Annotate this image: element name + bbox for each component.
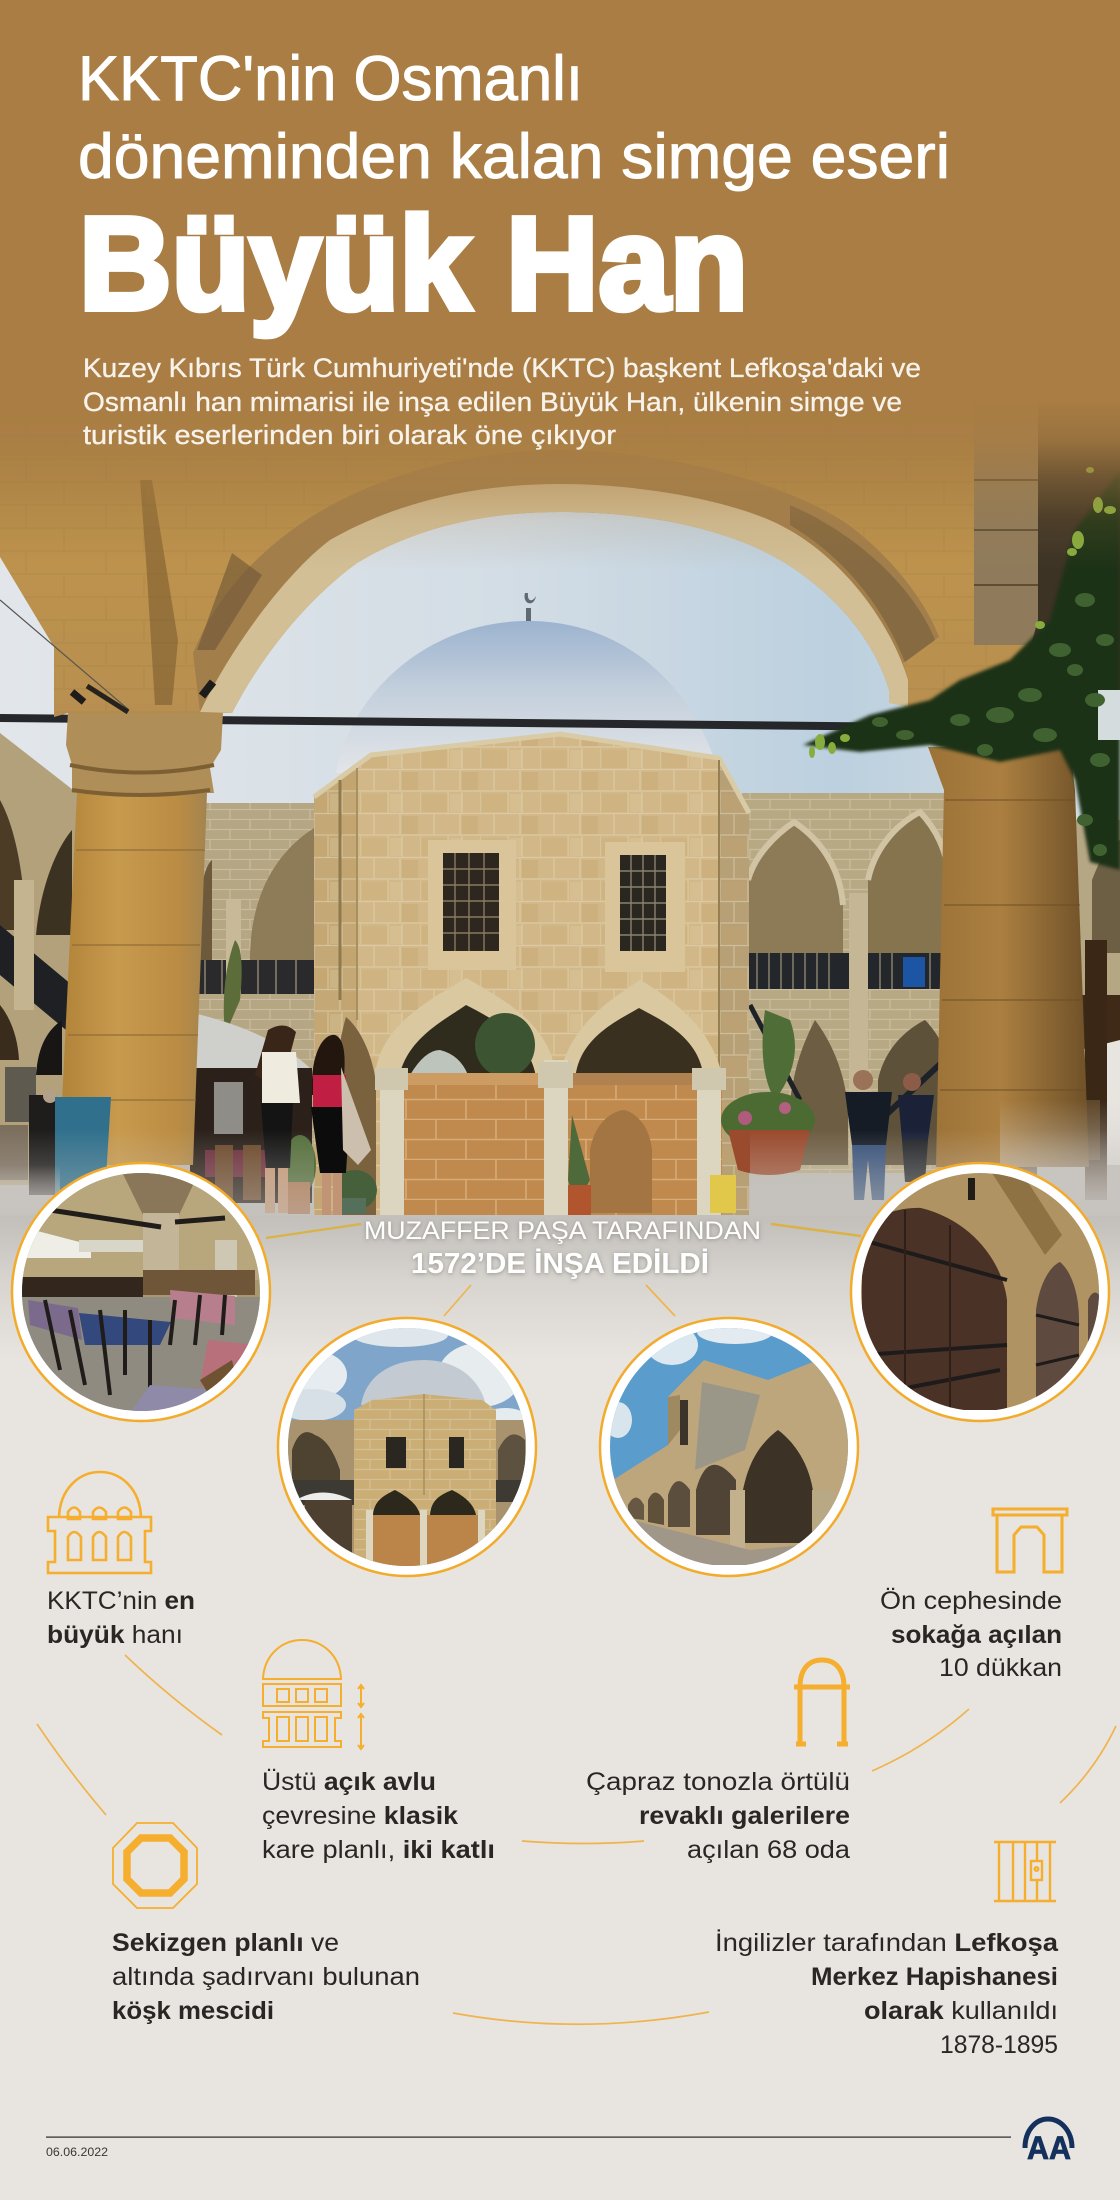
icon: prison bars bbox=[994, 1842, 1056, 1901]
icon: shop gate bbox=[993, 1509, 1067, 1572]
arch inner cream ring bbox=[200, 484, 908, 713]
floor fade at sides bbox=[0, 1138, 314, 1214]
potted plant right bbox=[710, 1092, 815, 1213]
photo circle 2: kiosk and dome bbox=[278, 1318, 536, 1576]
fountain base bbox=[402, 1073, 722, 1215]
building beyond right column bbox=[1075, 820, 1120, 1000]
icon: domed building bbox=[48, 1472, 151, 1573]
intro paragraph: Osmanlı han mimarisi ile inşa edilen Büyük Han, ülkenin simge ve bbox=[83, 387, 902, 417]
text: ten shops: sokağa açılan bbox=[891, 1621, 1062, 1649]
text: ten shops bbox=[880, 1587, 1062, 1682]
wire and lamps bbox=[0, 600, 129, 710]
fact: central prison bbox=[715, 1842, 1059, 2059]
window left bbox=[428, 840, 516, 970]
text: 68 rooms: revaklı galerilere bbox=[639, 1802, 850, 1830]
kiosk arches bbox=[335, 978, 722, 1215]
umbrella bbox=[193, 1013, 310, 1068]
restaurant behind visitors bbox=[190, 1068, 312, 1203]
date: 06.06.2022 bbox=[46, 2147, 108, 2159]
visitors left bbox=[255, 1025, 371, 1215]
caption line 2: 1572’DE İNŞA EDİLDİ bbox=[411, 1248, 709, 1280]
logo: AA: AA bbox=[1027, 2130, 1071, 2166]
wooden table right bbox=[1017, 940, 1120, 1200]
title line 2: döneminden kalan simge eseri bbox=[78, 122, 950, 192]
main photograph: Büyük Han courtyard bbox=[0, 400, 1120, 1360]
text: ten shops: Ön cephesinde bbox=[880, 1587, 1062, 1615]
text: central prison: Merkez Hapishanesi bbox=[811, 1963, 1058, 1991]
text: central prison bbox=[715, 1928, 1059, 2059]
text: open courtyard: çevresine klasik bbox=[262, 1802, 458, 1830]
icon: two storey plan bbox=[263, 1640, 364, 1749]
rib shadow bbox=[140, 480, 178, 705]
road line markings bbox=[266, 1224, 861, 1238]
decorative connector lines bbox=[37, 1285, 1116, 2024]
foliage right bbox=[803, 467, 1120, 870]
icon: octagon bbox=[113, 1823, 197, 1908]
fact: ten shops bbox=[880, 1509, 1067, 1682]
photo circle 4: wooden doors bbox=[851, 1163, 1109, 1421]
fact: 68 rooms bbox=[586, 1660, 850, 1864]
arch outer brown ring bbox=[193, 450, 939, 712]
small plants near visitors bbox=[284, 1135, 377, 1214]
title main name: Büyük Han bbox=[79, 190, 748, 337]
intro paragraph: Kuzey Kıbrıs Türk Cumhuriyeti'nde (KKTC) başkent Lefkoşa'daki ve bbox=[83, 353, 921, 383]
intro paragraph bbox=[83, 353, 921, 450]
fact: octagonal mosque bbox=[112, 1823, 420, 2025]
blue bin bbox=[55, 1097, 111, 1195]
sky bbox=[0, 512, 1082, 820]
text: open courtyard: kare planlı, iki katlı bbox=[262, 1836, 495, 1864]
octagonal kiosk bbox=[314, 734, 749, 1215]
pier and dark corner bbox=[974, 450, 1038, 645]
title bbox=[78, 44, 950, 337]
right stone column bbox=[928, 747, 1089, 1167]
photo circle 3: arcade perspective bbox=[600, 1318, 858, 1576]
visitors right bbox=[845, 1070, 934, 1200]
text: octagonal mosque: köşk mescidi bbox=[112, 1997, 274, 2025]
text: largest han: büyük hanı bbox=[47, 1621, 183, 1649]
vault and arch above bbox=[0, 400, 1120, 720]
window right bbox=[605, 842, 685, 972]
text: central prison: İngilizler tarafından Lefkoşa bbox=[715, 1928, 1059, 1957]
kiosk columns bbox=[375, 1060, 726, 1215]
footer rule bbox=[46, 2136, 1011, 2138]
dome with finial bbox=[336, 593, 718, 773]
fact: open courtyard bbox=[262, 1640, 495, 1864]
text: largest han bbox=[47, 1587, 195, 1649]
text: 68 rooms: Çapraz tonozla örtülü bbox=[586, 1768, 850, 1796]
back wall right bbox=[742, 793, 957, 1173]
left stone column bbox=[59, 712, 223, 1165]
caption: builder and date bbox=[364, 1217, 761, 1280]
title line 1: KKTC'nin Osmanlı bbox=[78, 44, 583, 114]
text: largest han: KKTC’nin en bbox=[47, 1587, 195, 1615]
text: ten shops: 10 dükkan bbox=[939, 1654, 1062, 1682]
ground bbox=[0, 1165, 1120, 1320]
fact: largest han bbox=[47, 1472, 195, 1649]
text: central prison: 1878-1895 bbox=[940, 2031, 1058, 2059]
text: 68 rooms bbox=[586, 1768, 850, 1864]
cable bbox=[0, 718, 933, 727]
text: octagonal mosque: altında şadırvanı bulunan bbox=[112, 1963, 420, 1991]
sky gap right of the column bbox=[1090, 680, 1120, 745]
caption line 1: MUZAFFER PAŞA TARAFINDAN bbox=[364, 1217, 761, 1245]
intro paragraph: turistik eserlerinden biri olarak öne çıkıyor bbox=[83, 420, 616, 450]
text: octagonal mosque bbox=[112, 1929, 420, 2025]
text: open courtyard bbox=[262, 1768, 495, 1864]
text: 68 rooms: açılan 68 oda bbox=[687, 1836, 850, 1864]
text: central prison: olarak kullanıldı bbox=[864, 1997, 1058, 2025]
gold header fade bbox=[0, 0, 1120, 600]
text: octagonal mosque: Sekizgen planlı ve bbox=[112, 1929, 339, 1957]
icon: arch bbox=[794, 1660, 850, 1745]
text: open courtyard: Üstü açık avlu bbox=[262, 1768, 436, 1796]
photo circle 1: courtyard restaurant bbox=[12, 1163, 270, 1421]
back wall left bbox=[198, 803, 314, 1150]
far left building bbox=[0, 733, 77, 1195]
